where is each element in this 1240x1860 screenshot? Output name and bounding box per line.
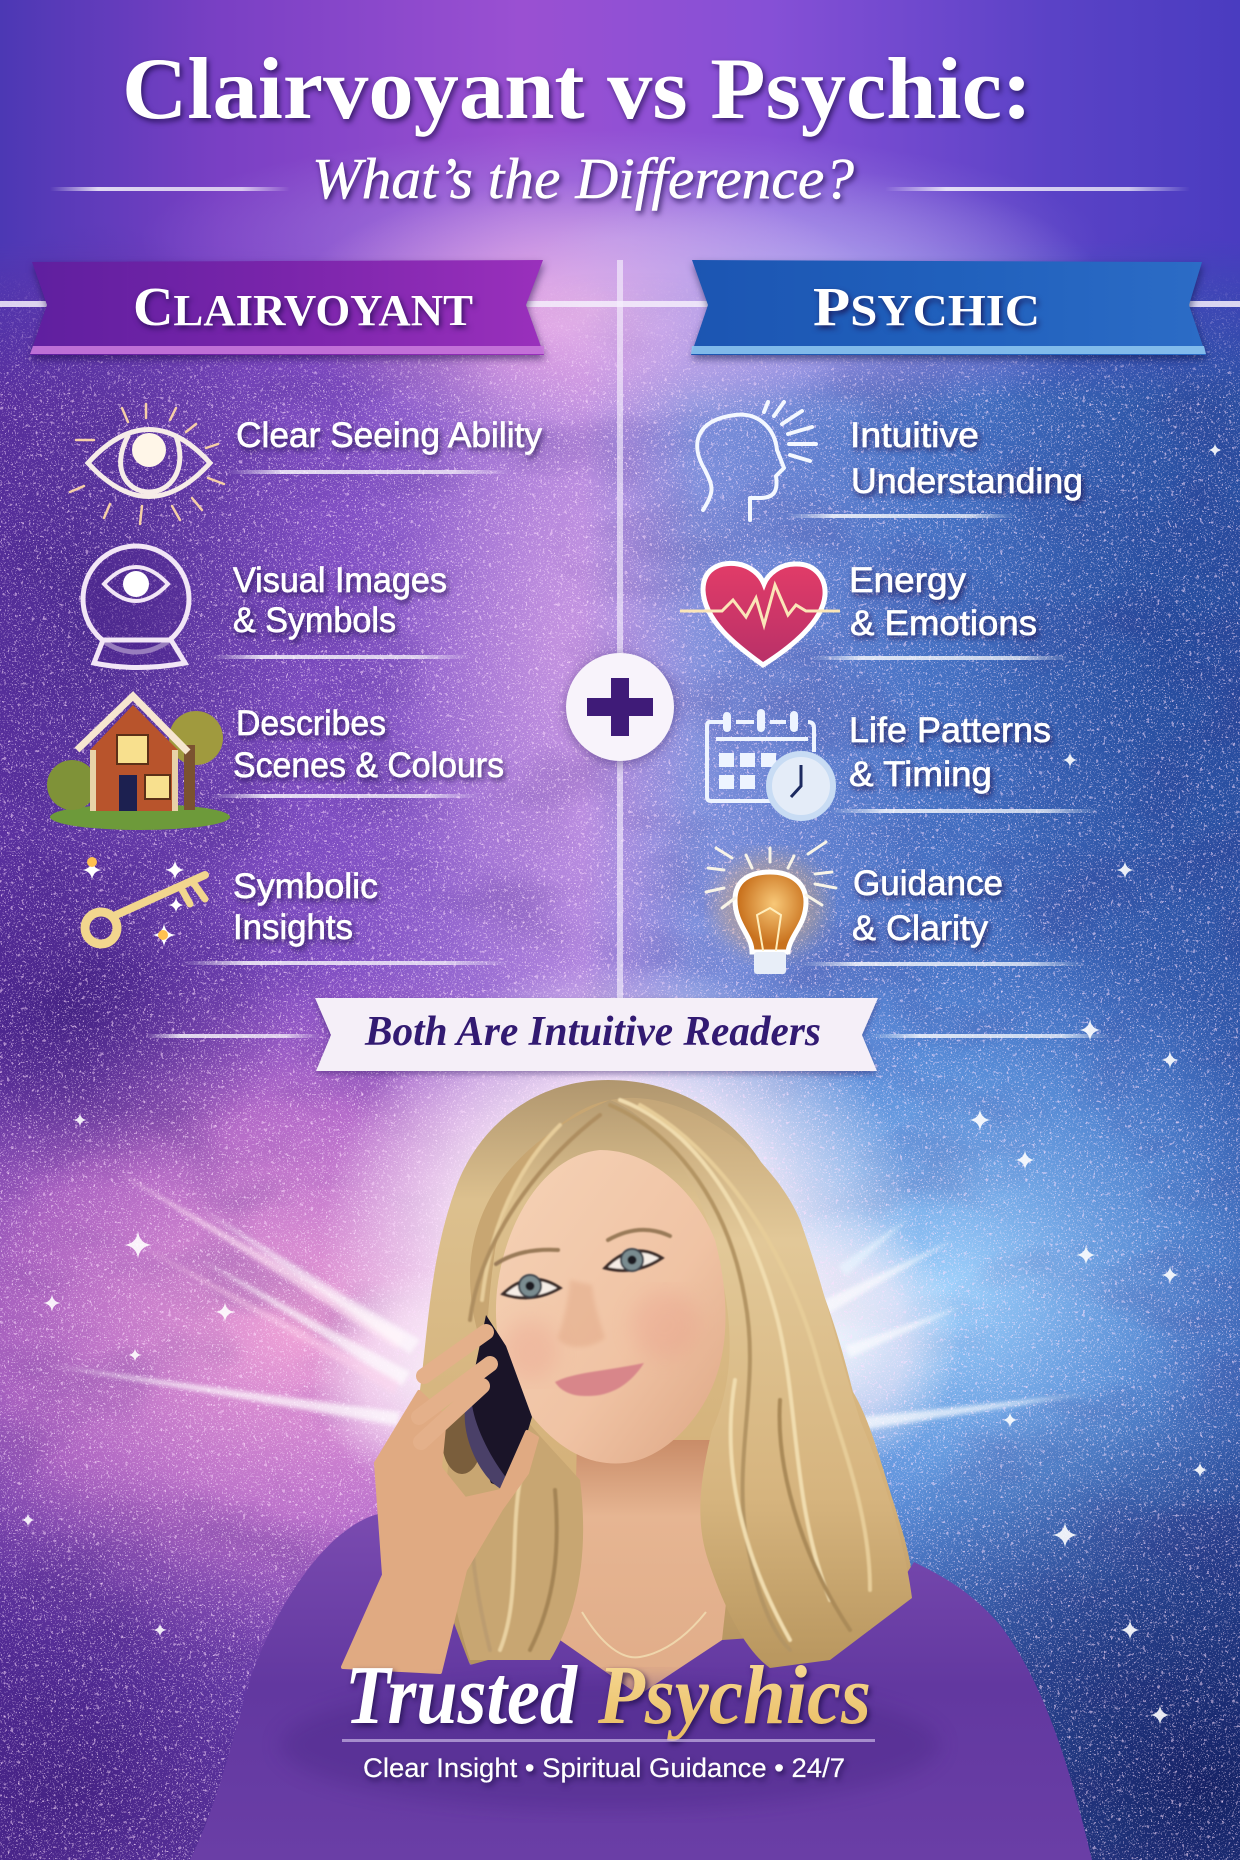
icon: golden key [82,857,205,947]
fingers [419,1332,490,1442]
face [496,1150,726,1463]
label: describes scenes: Scenes & Colours [233,746,504,785]
footer brand [280,1649,940,1810]
hair front right [610,1098,912,1668]
label: intuitive understanding: Intuitive [850,416,979,455]
icon: calendar and clock [707,709,833,818]
hair front left [446,1100,610,1660]
necklace [582,1612,706,1657]
subtitle with side rules [50,146,1190,211]
subtitle with side rules: What’s the Difference? [312,146,854,211]
lips [555,1363,644,1396]
label: life patterns [849,711,1051,794]
label: visual images [233,561,447,640]
label: visual images: Visual Images [233,561,447,600]
label: intuitive understanding [850,416,1083,501]
label: guidance clarity: & Clarity [852,909,989,948]
eyes [503,1249,662,1298]
hair back [418,1080,914,1680]
label: clear seeing: Clear Seeing Ability [236,416,543,455]
light rays behind the reader [47,1169,1086,1432]
icon: heart with pulse [680,563,840,665]
banner: clairvoyant [30,260,544,355]
large sparkles [21,443,1222,1725]
banner: psychic [691,260,1206,355]
icon: crystal ball [83,546,189,668]
phone edge [465,1405,508,1490]
label: energy emotions: & Emotions [850,604,1037,643]
icon: head with intuition rays [697,402,816,520]
column dividers [0,260,1240,1000]
wordmark: trusted psychics: Psychics [597,1649,871,1742]
shadow between fingers and phone [442,1406,482,1474]
nose [558,1280,605,1347]
label: intuitive understanding: Understanding [851,462,1083,501]
ribbon: both are intuitive readers: Both Are Intuitive Readers [364,1009,821,1055]
forearm and hand [343,1392,537,1672]
label: life patterns: Life Patterns [849,711,1051,750]
title: Clairvoyant vs Psychic: [122,41,1032,138]
icon: light bulb [706,842,836,974]
label: symbolic insights: Symbolic [233,867,378,906]
wordmark: trusted psychics [345,1649,871,1742]
label: visual images: & Symbols [233,601,396,640]
banner: psychic: PSYCHIC [813,276,1040,337]
label: life patterns: & Timing [849,755,992,794]
label: guidance clarity: Guidance [853,864,1003,903]
wordmark: trusted psychics: Trusted [345,1649,579,1742]
brows [496,1230,670,1264]
neck and chest [490,1440,735,1695]
label: energy emotions [849,561,1037,643]
label: guidance clarity [852,864,1003,948]
ribbon: both are intuitive readers [145,998,1110,1071]
panel: psychic traits [680,402,1100,974]
hair strands [470,1100,870,1650]
label: energy emotions: Energy [849,561,967,600]
icon: radiant eye [70,404,224,524]
panel: clairvoyant traits [47,404,543,965]
plus badge [566,653,674,761]
label: describes scenes: Describes [236,704,386,743]
label: describes scenes [233,704,504,785]
phone [465,1315,532,1489]
cheeks [502,1291,699,1380]
icon: house [47,696,230,830]
label: symbolic insights: Insights [233,908,353,947]
portrait: reader on the phone [190,1080,1092,1860]
label: symbolic insights [233,867,378,947]
tagline: Clear Insight • Spiritual Guidance • 24/7 [363,1753,845,1783]
banner: clairvoyant: CLAIRVOYANT [133,276,473,337]
sweater [190,1514,1092,1860]
